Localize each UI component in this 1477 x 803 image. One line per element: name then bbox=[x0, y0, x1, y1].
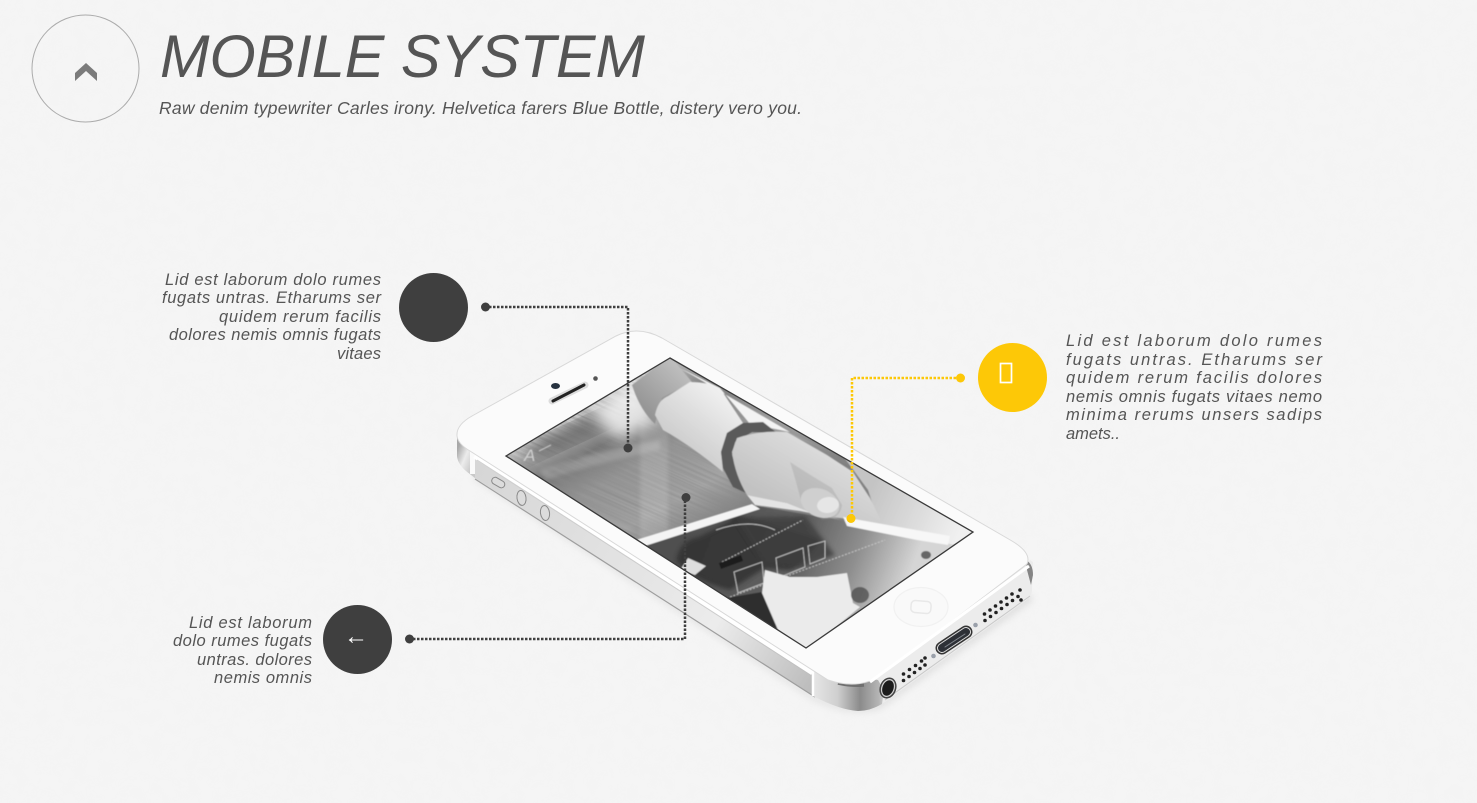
screws bbox=[931, 623, 978, 658]
text block: bottom-left: Lid est laborum bbox=[189, 614, 312, 632]
white paper strip bbox=[636, 504, 760, 546]
phone front face bbox=[457, 331, 1028, 684]
text block: right: minima rerums unsers sadips bbox=[1066, 406, 1322, 424]
icon: yellow circle with placeholder glyph bbox=[978, 343, 1047, 412]
right paper bbox=[845, 460, 972, 545]
text block: top-left: dolores nemis omnis fugats bbox=[169, 326, 381, 344]
screen photo: hand and tablet bbox=[507, 358, 972, 647]
earpiece, camera and sensor bbox=[551, 376, 598, 401]
title: MOBILE SYSTEM bbox=[160, 23, 645, 90]
text block: right: quidem rerum facilis dolores bbox=[1066, 369, 1322, 387]
hand bbox=[732, 432, 884, 527]
text block: right: nemis omnis fugats vitaes nemo bbox=[1066, 388, 1322, 406]
screen border bbox=[506, 358, 973, 648]
subtitle: Raw denim typewriter Carles irony. Helvetica farers Blue Bottle, distery vero you. bbox=[159, 98, 802, 118]
text block: bottom-left bbox=[173, 614, 312, 687]
icon: dark circle with left arrow: ← bbox=[344, 623, 368, 650]
text block: right: amets.. bbox=[1066, 425, 1120, 443]
text block: bottom-left: untras. dolores bbox=[197, 651, 312, 669]
text block: top-left: fugats untras. Etharums ser bbox=[162, 289, 382, 307]
text block: right bbox=[1066, 332, 1324, 443]
volume and mute buttons bbox=[490, 476, 550, 521]
lightning port bbox=[942, 632, 966, 648]
panels of dashboard bbox=[716, 520, 885, 597]
text block: bottom-left: nemis omnis bbox=[214, 669, 312, 687]
white lower patch bbox=[762, 570, 860, 652]
sleeve and arm bbox=[632, 356, 692, 424]
illustration: smartphone bbox=[456, 330, 1033, 712]
screen photo: hand and tablet: A bbox=[523, 446, 535, 465]
text block: top-left bbox=[162, 271, 382, 363]
phone shadow bbox=[475, 472, 1032, 711]
dark tablet area bbox=[647, 506, 954, 624]
text block: right: fugats untras. Etharums ser bbox=[1066, 351, 1324, 369]
home button bbox=[894, 588, 948, 626]
connector: yellow callout bbox=[846, 374, 965, 523]
icon: dark circle with left arrow bbox=[323, 605, 392, 674]
text block: top-left: Lid est laborum dolo rumes bbox=[165, 271, 381, 289]
text block: right: Lid est laborum dolo rumes bbox=[1066, 332, 1322, 350]
speaker grille left bbox=[902, 656, 927, 682]
text block: top-left: vitaes bbox=[337, 345, 381, 363]
text block: top-left: quidem rerum facilis bbox=[219, 308, 381, 326]
speaker grille right bbox=[983, 588, 1023, 622]
icon: chevron up in outlined circle bbox=[32, 15, 139, 122]
phone side band bbox=[457, 434, 830, 697]
icon: dark circle top-left bbox=[399, 273, 468, 342]
connector: top-left callout bbox=[481, 302, 632, 452]
watch band bbox=[721, 422, 777, 493]
phone bottom edge bbox=[813, 560, 1033, 711]
text block: bottom-left: dolo rumes fugats bbox=[173, 632, 312, 650]
headphone jack bbox=[878, 676, 898, 700]
connector: bottom-left callout bbox=[405, 493, 690, 644]
grid area bbox=[728, 592, 778, 629]
